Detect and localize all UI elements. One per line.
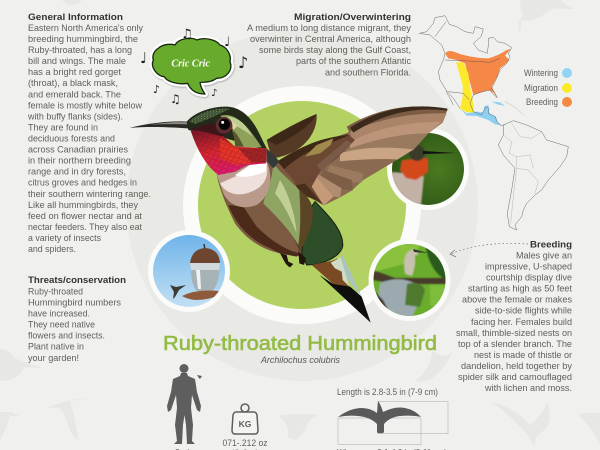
beak bbox=[129, 121, 200, 129]
photo: bird on green bbox=[387, 128, 469, 210]
text block: general information: female is mostly white below bbox=[28, 100, 142, 110]
text block: general information: (throat), a black mask, bbox=[28, 78, 118, 88]
wing top edge bbox=[350, 106, 447, 133]
photo: feeder bbox=[148, 230, 230, 312]
large pale circle bbox=[126, 29, 478, 381]
legend bbox=[524, 68, 572, 107]
dotted arrow to nest photo bbox=[450, 243, 528, 257]
heading: Breeding: Breeding bbox=[530, 240, 572, 250]
music notes bbox=[140, 27, 248, 106]
feet bbox=[280, 253, 293, 267]
text block: migration: overwinter in Central America, although bbox=[250, 34, 411, 44]
label: weight: 071-.212 oz bbox=[222, 438, 268, 448]
legend: Wintering bbox=[524, 68, 558, 78]
text block: general information: has a bright red gorget bbox=[28, 67, 121, 77]
text block: general information: Ruby-throated, has a long bbox=[28, 45, 132, 55]
belly dark edge bbox=[228, 205, 300, 257]
text block: general information: a variety of insects bbox=[28, 233, 101, 243]
text block: threats: Hummingbird numbers bbox=[28, 298, 121, 308]
near wing feathers bbox=[305, 106, 447, 205]
speech bubble bbox=[152, 38, 231, 94]
text block: general information bbox=[27, 23, 151, 254]
scientific name: Archilochus colubris bbox=[260, 355, 340, 366]
text block: breeding: above the female or makes bbox=[462, 295, 572, 305]
bubble text: Cric Cric bbox=[171, 58, 210, 69]
chest bbox=[217, 162, 270, 207]
text block: general information: Eastern North America's only bbox=[28, 23, 143, 33]
music notes: ♫ bbox=[170, 92, 181, 106]
text block: migration: parts of the southern Atlantic bbox=[296, 56, 411, 66]
mask bbox=[188, 123, 233, 137]
music notes: ♪ bbox=[211, 88, 217, 99]
wing leading band bbox=[277, 135, 350, 169]
text block: general information: their southern wintering range. bbox=[28, 189, 151, 199]
white ring bbox=[183, 86, 421, 324]
gorget bbox=[191, 130, 267, 175]
icon: weight: KG bbox=[239, 419, 252, 429]
tail bbox=[312, 258, 350, 288]
heading: Threats/conservation: Threats/conservation bbox=[28, 275, 126, 286]
North America outline bbox=[419, 16, 512, 126]
text block: general information: bill and wings. The male bbox=[28, 56, 126, 66]
legend: Breeding bbox=[526, 97, 558, 107]
text block: breeding: nest is made of thistle or bbox=[474, 350, 572, 360]
music notes: ♪ bbox=[153, 83, 160, 96]
range: breeding bbox=[445, 49, 511, 98]
far wing bbox=[267, 114, 317, 158]
range: migration bbox=[456, 62, 474, 112]
label: length: Length is 2.8-3.5 in (7-9 cm) bbox=[337, 387, 438, 397]
icon: human scale bbox=[167, 364, 202, 444]
text block: migration: A medium to long distance migrant, they bbox=[247, 23, 411, 33]
green circle bbox=[198, 101, 406, 309]
text block: breeding: top of a slender branch. The bbox=[458, 339, 572, 349]
text block: threats bbox=[28, 286, 121, 363]
text block: breeding: with lichen and moss. bbox=[484, 383, 572, 393]
text block: breeding: facing her. Females build bbox=[471, 317, 572, 327]
near wing base bbox=[283, 107, 447, 205]
photo: nest bbox=[368, 239, 450, 321]
text block: general information: citrus groves and hedges in bbox=[28, 178, 137, 188]
text block: breeding: starting as high as 50 feet bbox=[468, 284, 572, 294]
head dark cap bbox=[187, 107, 267, 148]
icon: weight bbox=[232, 404, 258, 434]
hummingbird illustration bbox=[129, 106, 447, 323]
text block: general information: and spiders. bbox=[28, 244, 76, 254]
text block: general information: and emerald back. The bbox=[28, 89, 121, 99]
title: Ruby-throated Hummingbird bbox=[163, 333, 437, 355]
text block: general information: deciduous forests and bbox=[28, 134, 115, 144]
speckled crown bbox=[189, 108, 230, 124]
text block: migration bbox=[247, 23, 411, 77]
text block: threats: Plant native in bbox=[28, 342, 84, 352]
music notes: ♪ bbox=[238, 53, 248, 72]
text block: general information: breeding hummingbird, the bbox=[28, 34, 138, 44]
text block: general information: in their northern breeding bbox=[28, 156, 131, 166]
text block: general information: across Canadian prairies bbox=[28, 145, 128, 155]
neck collar dark bbox=[267, 148, 279, 168]
icon: bird size silhouette bbox=[338, 401, 448, 444]
text block: general information: Like all hummingbirds, they bbox=[28, 200, 138, 210]
text block: general information: feed on flower nectar and at bbox=[28, 211, 142, 221]
text block: breeding: side-to-side flights while bbox=[475, 306, 572, 316]
text block: general information: range and in dry forests, bbox=[28, 167, 126, 177]
text block: threats: flowers and insects. bbox=[28, 331, 105, 341]
body belly bbox=[217, 150, 307, 257]
green cheek bbox=[220, 115, 262, 147]
text block: migration: some birds stay along the Gulf Coast, bbox=[259, 45, 411, 55]
text block: threats: your garden! bbox=[28, 353, 79, 363]
text block: threats: Ruby-throated bbox=[28, 286, 83, 296]
rear green bbox=[302, 202, 343, 265]
map: South America bbox=[498, 121, 568, 230]
eye bbox=[216, 117, 232, 134]
heading: General Information: General Information bbox=[28, 12, 123, 23]
music notes: ♩ bbox=[224, 35, 230, 50]
text block: general information: with buffy flanks (sides). bbox=[27, 111, 123, 121]
near wing coverts bbox=[283, 133, 355, 205]
text block: breeding: Males give an bbox=[516, 250, 572, 260]
music notes: ♫ bbox=[181, 27, 193, 42]
text block: threats: They need native bbox=[28, 320, 95, 330]
text block: general information: They are found in bbox=[28, 122, 98, 132]
text block: breeding: courtship display dive bbox=[486, 273, 572, 283]
text block: breeding bbox=[456, 250, 572, 393]
text block: breeding: spider silk and camouflaged bbox=[458, 372, 572, 382]
heading: Migration/Overwintering: Migration/Overwintering bbox=[294, 12, 411, 23]
text block: breeding: impressive, U-shaped bbox=[485, 262, 572, 272]
text block: general information: nectar feeders. They also eat bbox=[28, 222, 142, 232]
text block: breeding: dandelion, held together by bbox=[461, 361, 572, 371]
range: wintering bbox=[460, 102, 505, 126]
legend: Migration bbox=[524, 83, 558, 93]
music notes: ♩ bbox=[140, 49, 147, 67]
map bbox=[419, 16, 523, 126]
text block: migration: and southern Florida. bbox=[325, 67, 411, 77]
green side bbox=[263, 162, 300, 245]
text block: threats: have increased. bbox=[28, 309, 90, 319]
text block: breeding: small, thimble-sized nests on bbox=[456, 328, 572, 338]
